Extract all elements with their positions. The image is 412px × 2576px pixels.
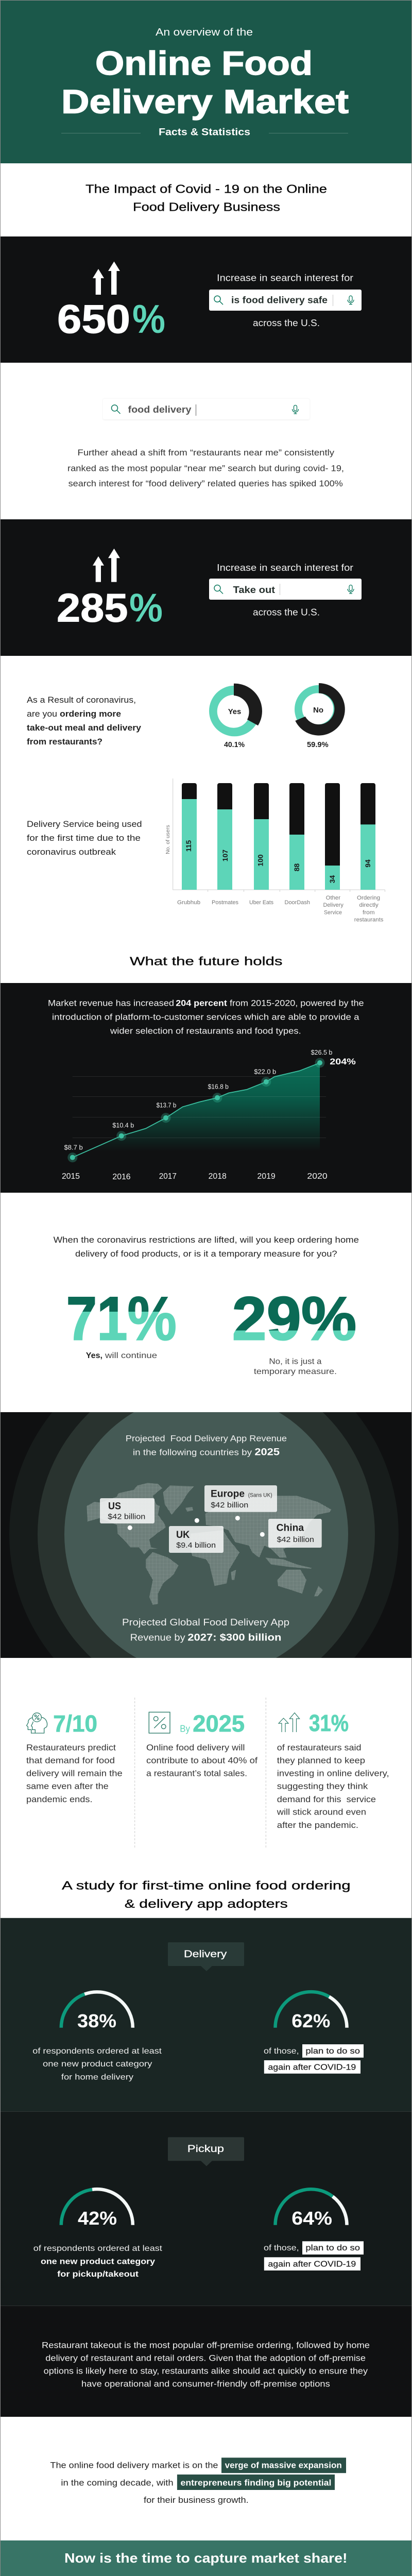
text: projected by 2025: 2025 <box>254 1447 280 1458</box>
text: market expansion statement: for their business growth. <box>144 2495 249 2505</box>
heading: impact of covid: The Impact of Covid - 19 on the Online <box>85 182 327 196</box>
value labels: $10.4 b <box>112 1122 134 1129</box>
icon: outlined up arrows <box>279 1713 300 1732</box>
card: Europe: $42 billion <box>211 1501 248 1510</box>
text: delivery service description <box>27 819 142 857</box>
gauge: 64 percent <box>275 2189 347 2229</box>
text: take-out question: from restaurants? <box>27 737 102 747</box>
card: Europe: Europe <box>211 1488 245 1499</box>
text: 62 percent description: of those, <box>264 2047 299 2056</box>
tab: pickup: Pickup <box>187 2144 224 2155</box>
card: UK <box>169 1526 224 1553</box>
text: market expansion statement: in the coming decade, with <box>61 2478 174 2487</box>
tab: delivery: Delivery <box>184 1949 227 1960</box>
subtitle with rules: Facts & Statistics <box>159 127 250 138</box>
description: delivery will remain the <box>26 1769 123 1778</box>
heading: impact of covid <box>85 182 327 213</box>
text: take-out question: ordering more <box>60 709 121 719</box>
text: delivery service description: for the first time due to the <box>27 833 141 843</box>
dotted world map <box>87 1483 331 1605</box>
map location dots <box>128 1516 265 1537</box>
text: market revenue paragraph: 204 percent <box>176 999 227 1008</box>
description: suggesting they think <box>277 1782 368 1791</box>
bar category labels <box>177 895 384 923</box>
description: of restaurateurs said <box>277 1743 362 1753</box>
text: projected by 2025 <box>126 1434 287 1458</box>
text: takeout paragraph: delivery of restaurant and retail orders. Given that the adoption of off-premise <box>45 2354 366 2363</box>
card: UK: UK <box>176 1530 190 1540</box>
text: 38 percent description: one new product category <box>43 2060 152 2069</box>
gauge: 64 percent: 64% <box>291 2208 332 2229</box>
description: after the pandemic. <box>277 1821 358 1830</box>
text: across the US: across the U.S. <box>253 318 320 328</box>
text: take-out question <box>27 696 142 747</box>
card: Europe: (Sans UK) <box>248 1492 272 1498</box>
panel: pickup <box>0 2111 412 2306</box>
y axis label: No. of users <box>165 825 171 854</box>
text: projected by 2025: in the following countries by <box>133 1448 252 1458</box>
description: Restaurateurs predict <box>26 1743 116 1753</box>
text: market revenue paragraph: from 2015-2020, powered by the <box>230 999 364 1008</box>
banner: call to action <box>0 2540 412 2576</box>
description <box>146 1743 258 1778</box>
card: China <box>268 1519 322 1548</box>
bar values <box>184 840 372 883</box>
gauge: 38 percent <box>61 1992 133 2031</box>
tab: delivery <box>168 1942 244 1971</box>
stat: 71 percent yes: will continue <box>105 1351 157 1360</box>
description: that demand for food <box>26 1756 115 1766</box>
text: 42 percent description: for pickup/takeout <box>57 2270 139 2279</box>
dashed dividers <box>135 1698 266 1848</box>
text: delivery service description: Delivery Service being used <box>27 819 142 829</box>
year labels <box>62 1172 328 1181</box>
text: projected global revenue <box>122 1617 289 1643</box>
text: market expansion statement <box>50 2458 346 2505</box>
value labels: $8.7 b <box>64 1144 83 1151</box>
description: same even after the <box>26 1782 109 1791</box>
bar category labels: Uber Eats <box>249 900 273 906</box>
tab: pickup <box>168 2137 244 2166</box>
bars <box>182 783 375 890</box>
card: UK: $9.4 billion <box>176 1541 216 1550</box>
stat: 650 percent: % <box>132 296 165 342</box>
panel: 650 percent stat <box>0 236 412 363</box>
bar category labels: directly <box>359 902 379 908</box>
bar values: 88 <box>293 863 301 871</box>
title: Delivery Market <box>61 82 349 121</box>
donut chart: no: No <box>313 706 323 715</box>
panel: delivery <box>0 1918 412 2111</box>
stat column: 31 percent <box>277 1710 389 1830</box>
card: US: US <box>108 1501 121 1512</box>
search box: food delivery: food delivery <box>128 404 192 415</box>
stat value: 7/10 <box>53 1710 97 1737</box>
bar chart: delivery services <box>165 778 385 923</box>
growth label: 204% <box>330 1057 356 1066</box>
search box: is food delivery safe <box>209 290 362 311</box>
text: 38 percent description: of respondents ordered at least <box>32 2047 162 2056</box>
text: market revenue paragraph: wider selection of restaurants and food types. <box>110 1027 301 1036</box>
card: China: China <box>277 1523 304 1534</box>
text: restrictions question: When the coronavirus restrictions are lifted, will you keep ordering home <box>54 1235 359 1245</box>
text: takeout paragraph: have operational and consumer-friendly off-premise options <box>81 2379 330 2388</box>
search box: take out: Take out <box>233 585 275 595</box>
stat: 285 percent <box>57 585 163 631</box>
text: projected global revenue: 2027: $300 billion <box>187 1632 281 1643</box>
text: delivery service description: coronavirus outbreak <box>27 847 116 857</box>
bar category labels: Service <box>324 909 342 916</box>
stat: 285 percent: 285 <box>57 585 128 631</box>
banner: call to action: Now is the time to capture market share! <box>64 2550 347 2566</box>
bar values: 94 <box>364 859 372 868</box>
description: pandemic ends. <box>26 1795 93 1804</box>
bar category labels: Delivery <box>323 902 344 908</box>
value labels <box>64 1048 332 1151</box>
bar values: 115 <box>184 840 193 852</box>
donut chart: no <box>295 683 345 749</box>
header eyebrow: An overview of the <box>156 27 253 38</box>
text: 64 percent description <box>264 2241 364 2270</box>
stat value: 31% <box>309 1710 349 1736</box>
stat: 71 percent yes: Yes, <box>86 1351 102 1360</box>
card: US: $42 billion <box>108 1512 145 1521</box>
stat: 650 percent: 650 <box>57 296 130 342</box>
bar values: 107 <box>221 850 229 861</box>
card: US <box>100 1498 154 1523</box>
stat: 71 percent yes: 71% <box>66 1284 177 1353</box>
icon: heads with percent <box>27 1713 47 1733</box>
highlight: entrepreneurs <box>177 2475 335 2490</box>
text: takeout paragraph: options is likely here to stay, restaurants alike should act quickly to ensure they <box>44 2366 368 2376</box>
value labels: $13.7 b <box>157 1101 176 1109</box>
text: projected global revenue: Projected Global Food Delivery App <box>122 1617 289 1628</box>
data points <box>67 1058 325 1162</box>
value labels: $26.5 b <box>311 1048 332 1056</box>
donut chart: yes: Yes <box>228 707 241 716</box>
stat: 650 percent <box>57 296 165 342</box>
text: 42 percent description: of respondents ordered at least <box>33 2244 162 2253</box>
icon: up arrows <box>93 262 120 295</box>
icon: percent box <box>149 1712 170 1733</box>
text: market revenue paragraph: Market revenue has increased <box>48 999 174 1008</box>
text: 38 percent description <box>32 2047 162 2081</box>
text: take-out question: are you <box>27 709 57 719</box>
gauge: 62 percent: 62% <box>291 2010 330 2031</box>
stat: 29 percent no: No, it is just a <box>269 1357 322 1366</box>
title <box>61 44 349 121</box>
panel: 285 percent stat <box>0 519 412 656</box>
year labels: 2018 <box>209 1172 227 1181</box>
description: demand for this service <box>277 1795 376 1804</box>
highlight: massive expansion <box>221 2458 346 2473</box>
bar category labels: from <box>363 909 375 916</box>
text: take-out question: take-out meal and delivery <box>27 723 142 733</box>
text: 62 percent description: again after COVID-19 <box>268 2063 356 2072</box>
text: 62 percent description: plan to do so <box>305 2047 360 2056</box>
highlight: entrepreneurs: entrepreneurs finding big potential <box>180 2478 331 2487</box>
text: market expansion statement: The online food delivery market is on the <box>50 2460 218 2470</box>
donut chart: no: 59.9% <box>307 740 329 749</box>
text: restrictions question: delivery of food products, or is it a temporary measure for you? <box>75 1249 337 1259</box>
text: search interest: Increase in search interest for <box>217 273 353 283</box>
year labels: 2017 <box>159 1172 177 1181</box>
year labels: 2015 <box>62 1172 80 1181</box>
heading: study for adopters: & delivery app adopters <box>125 1897 288 1910</box>
heading: what the future holds: What the future holds <box>130 954 282 968</box>
text: 64 percent description: again after COVID-19 <box>268 2260 356 2269</box>
line chart: revenue 2015 to 2020 <box>62 1048 356 1181</box>
text: market revenue paragraph: introduction of platform-to-customer services which are able to provide a <box>52 1013 359 1022</box>
heading: study for adopters <box>62 1879 351 1910</box>
text: search shift paragraph: search interest for “food delivery” related queries has spiked 100% <box>68 479 343 488</box>
description: they planned to keep <box>277 1756 365 1766</box>
heading: impact of covid: Food Delivery Business <box>133 200 280 213</box>
bar category labels: DoorDash <box>284 900 310 906</box>
description: investing in online delivery, <box>277 1769 389 1778</box>
text: 64 percent description: plan to do so <box>305 2244 360 2252</box>
year labels: 2016 <box>112 1173 131 1181</box>
search box: take out <box>209 579 362 600</box>
text: take-out question: As a Result of coronavirus, <box>27 696 136 705</box>
stat value: 2025 <box>193 1710 245 1737</box>
heading: study for adopters: A study for first-time online food ordering <box>62 1879 351 1892</box>
gauge: 42 percent: 42% <box>78 2208 117 2229</box>
text: 42 percent description: one new product category <box>41 2258 155 2266</box>
year labels: 2019 <box>258 1172 276 1181</box>
panel: market revenue <box>0 983 412 1193</box>
donut chart: yes: 40.1% <box>224 740 245 749</box>
text: restrictions question <box>54 1235 359 1259</box>
text: 62 percent description <box>264 2044 364 2074</box>
description: a restaurant’s total sales. <box>146 1769 247 1778</box>
year labels: 2020 <box>307 1172 328 1181</box>
gauge: 42 percent <box>61 2189 133 2229</box>
text: projected by 2025: Projected Food Delivery App Revenue <box>126 1434 287 1444</box>
card: Europe <box>204 1485 277 1512</box>
text: across the US: across the U.S. <box>253 607 320 617</box>
panel: projected revenue map <box>0 1340 412 1729</box>
bar category labels: Postmates <box>212 900 238 906</box>
highlight: massive expansion: verge of massive expansion <box>225 2460 342 2470</box>
panel: restaurant takeout summary <box>0 2306 412 2417</box>
stat: 29 percent no: 29% <box>232 1284 356 1353</box>
panel: header <box>0 0 412 163</box>
bar category labels: Other <box>326 895 340 901</box>
bar category labels: restaurants <box>354 917 384 923</box>
text: market revenue paragraph <box>48 999 364 1036</box>
text: projected global revenue: Revenue by <box>130 1632 185 1642</box>
stat: 29 percent no: temporary measure. <box>254 1367 337 1376</box>
search box: food delivery <box>102 398 311 421</box>
bar values: 100 <box>256 854 265 867</box>
stat value: By <box>180 1723 190 1734</box>
description: Online food delivery will <box>146 1743 245 1753</box>
card: China: $42 billion <box>277 1535 314 1544</box>
stat column: 7/10 <box>26 1710 123 1804</box>
bar category labels: Grubhub <box>177 900 200 906</box>
stat: 285 percent: % <box>129 585 163 631</box>
gauge: 38 percent: 38% <box>77 2010 116 2031</box>
title: Online Food <box>95 44 313 82</box>
description <box>277 1743 389 1830</box>
search box: is food delivery safe: is food delivery safe <box>231 295 328 305</box>
description: contribute to about 40% of <box>146 1756 258 1766</box>
text: 64 percent description: of those, <box>264 2244 299 2252</box>
icon: up arrows <box>93 549 120 582</box>
text: search shift paragraph: Further ahead a shift from “restaurants near me” consistently <box>77 448 335 457</box>
value labels: $16.8 b <box>208 1082 229 1090</box>
text: takeout paragraph <box>42 2341 370 2388</box>
gauge: 62 percent <box>275 1992 347 2031</box>
donut chart: yes <box>209 684 262 749</box>
description <box>26 1743 123 1804</box>
value labels: $22.0 b <box>254 1068 276 1076</box>
description: will stick around even <box>277 1808 366 1817</box>
text: 38 percent description: for home delivery <box>61 2073 133 2081</box>
text: search shift paragraph: ranked as the most popular “near me” search but during covid- 19, <box>67 464 344 473</box>
text: search interest: Increase in search interest for <box>217 563 353 573</box>
bar category labels: Ordering <box>357 895 380 901</box>
stat column: by 2025 <box>146 1710 258 1778</box>
bar values: 34 <box>328 875 336 883</box>
text: 42 percent description <box>33 2244 162 2279</box>
text: search shift paragraph <box>67 448 344 488</box>
text: takeout paragraph: Restaurant takeout is the most popular off-premise ordering, followed by home <box>42 2341 370 2350</box>
